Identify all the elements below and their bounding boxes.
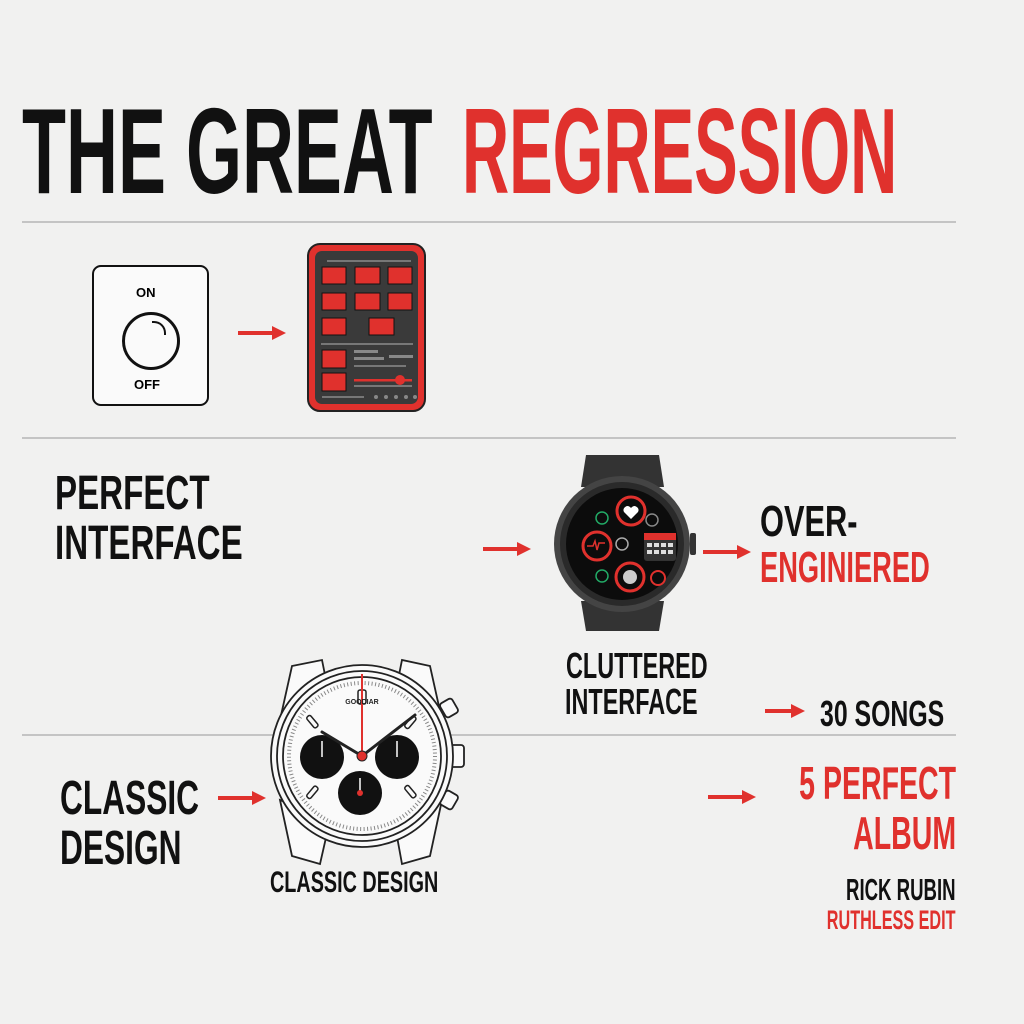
heading: classic design: DESIGN (60, 822, 181, 875)
label: 5 perfect album (799, 757, 956, 859)
heading: perfect interface (55, 467, 243, 570)
label: cluttered interface: CLUTTERED (566, 645, 708, 686)
label: rick rubin ruthless edit: RUTHLESS EDIT (827, 905, 956, 935)
title: REGRESSION (462, 83, 897, 219)
arrow 5 (708, 790, 756, 804)
heading: perfect interface: PERFECT (55, 467, 210, 520)
icon: classic chronograph watch: GOODIAR (345, 699, 379, 706)
label: classic design under watch: CLASSIC DESIGN (270, 866, 438, 899)
icon: smartwatch (554, 455, 696, 631)
label: rick rubin ruthless edit (827, 872, 956, 935)
arrow: 30 songs (765, 704, 805, 718)
label: 30 songs: 30 SONGS (820, 693, 944, 734)
heading: perfect interface: INTERFACE (55, 517, 243, 570)
arrow 3 (703, 545, 751, 559)
label: 5 perfect album: ALBUM (853, 807, 956, 859)
icon: on/off switch (92, 265, 209, 406)
arrow 2 (483, 542, 531, 556)
label: cluttered interface (565, 645, 708, 722)
icon: on/off switch: OFF (134, 377, 160, 392)
label: over-engineered (760, 497, 930, 592)
label: 5 perfect album: 5 PERFECT (799, 757, 956, 809)
arrow 1 (238, 326, 286, 340)
label: over-engineered: OVER- (760, 497, 858, 546)
arrow 4 (218, 791, 266, 805)
icon: on/off switch: ON (136, 285, 156, 300)
heading: classic design: CLASSIC (60, 772, 199, 825)
heading: classic design (60, 772, 199, 875)
icon: classic chronograph watch (270, 658, 465, 866)
label: over-engineered: ENGINIERED (760, 543, 930, 592)
title (22, 83, 897, 219)
label: rick rubin ruthless edit: RICK RUBIN (846, 872, 956, 907)
title: THE GREAT (22, 83, 433, 219)
icon: cluttered tablet (307, 243, 426, 412)
label: cluttered interface: INTERFACE (565, 681, 698, 722)
